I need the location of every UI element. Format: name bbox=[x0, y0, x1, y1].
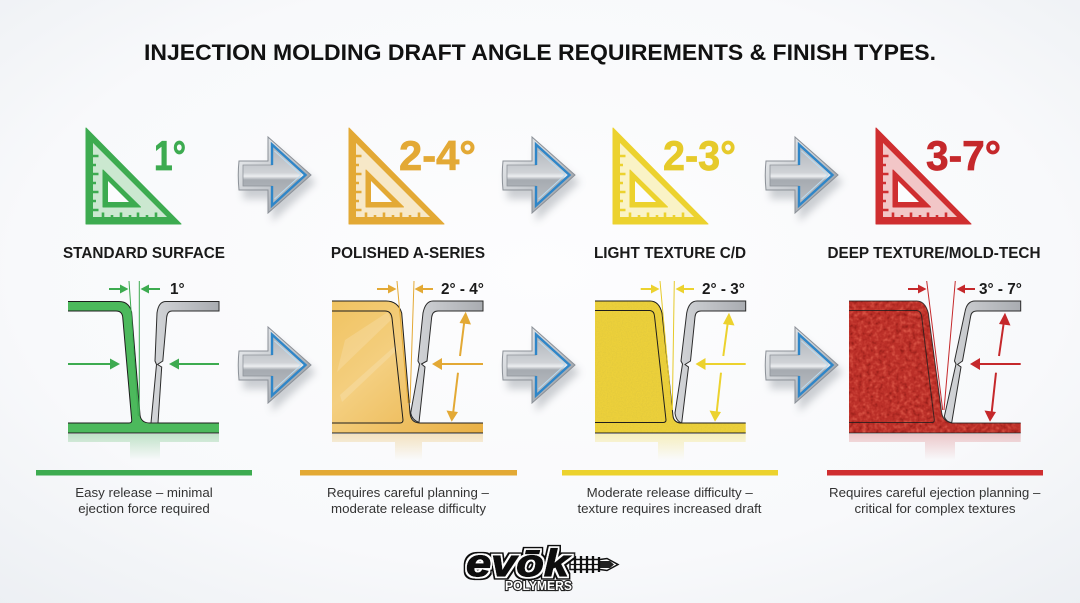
column: light texture bbox=[562, 128, 778, 516]
description: Requires careful planning – bbox=[327, 485, 490, 500]
separator bar green bbox=[36, 470, 252, 476]
description: critical for complex textures bbox=[854, 501, 1016, 516]
angle value 2-4 degrees: 2-4° bbox=[399, 132, 476, 179]
description: Easy release – minimal bbox=[75, 485, 213, 500]
description: ejection force required bbox=[78, 501, 210, 516]
diagram: deep texture draft bbox=[839, 281, 1030, 460]
description: Moderate release difficulty – bbox=[587, 485, 753, 500]
draft label 2-3 degrees: 2° - 3° bbox=[702, 281, 745, 298]
angle value 3-7 degrees: 3-7° bbox=[926, 132, 1001, 179]
arrow: top row 2 bbox=[502, 137, 580, 222]
draft label 2-4 degrees: 2° - 4° bbox=[441, 281, 484, 298]
separator bar red bbox=[827, 470, 1043, 476]
draft label 1 degree: 1° bbox=[170, 281, 185, 298]
heading: light texture: LIGHT TEXTURE C/D bbox=[594, 245, 746, 262]
arrow: bottom row 3 bbox=[765, 327, 843, 412]
arrow: top row 1 bbox=[238, 137, 316, 222]
heading: standard surface: STANDARD SURFACE bbox=[63, 245, 225, 262]
column: deep texture bbox=[827, 128, 1043, 516]
diagram: polished draft bbox=[322, 281, 492, 460]
icon: screw bbox=[570, 556, 618, 573]
angle value 2-3 degrees: 2-3° bbox=[663, 132, 736, 179]
heading: polished a-series: POLISHED A-SERIES bbox=[331, 245, 485, 262]
separator bar yellow bbox=[562, 470, 778, 476]
arrow: top row 3 bbox=[765, 137, 843, 222]
icon: yellow set square bbox=[613, 128, 708, 224]
title: INJECTION MOLDING DRAFT ANGLE REQUIREMENTS & FINISH TYPES. bbox=[144, 40, 936, 65]
logo: evok polymers bbox=[466, 543, 618, 593]
arrow: bottom row 2 bbox=[502, 327, 580, 412]
wordmark: evōk bbox=[466, 543, 571, 585]
description: texture requires increased draft bbox=[577, 501, 762, 516]
heading: deep texture: DEEP TEXTURE/MOLD-TECH bbox=[827, 245, 1041, 262]
icon: orange set square bbox=[349, 128, 444, 224]
sub wordmark: POLYMERS bbox=[505, 579, 572, 593]
description: Requires careful ejection planning – bbox=[829, 485, 1041, 500]
separator bar orange bbox=[300, 470, 517, 476]
diagram: light texture draft bbox=[585, 281, 755, 460]
draft label 3-7 degrees: 3° - 7° bbox=[979, 281, 1022, 298]
arrow: bottom row 1 bbox=[238, 327, 316, 412]
description: moderate release difficulty bbox=[331, 501, 486, 516]
angle value 1 degree: 1° bbox=[154, 132, 186, 179]
icon: green set square bbox=[86, 128, 181, 224]
icon: red set square bbox=[876, 128, 971, 224]
column: polished a-series bbox=[300, 128, 517, 516]
diagram: standard surface draft bbox=[58, 281, 229, 460]
column: standard surface bbox=[36, 128, 252, 516]
